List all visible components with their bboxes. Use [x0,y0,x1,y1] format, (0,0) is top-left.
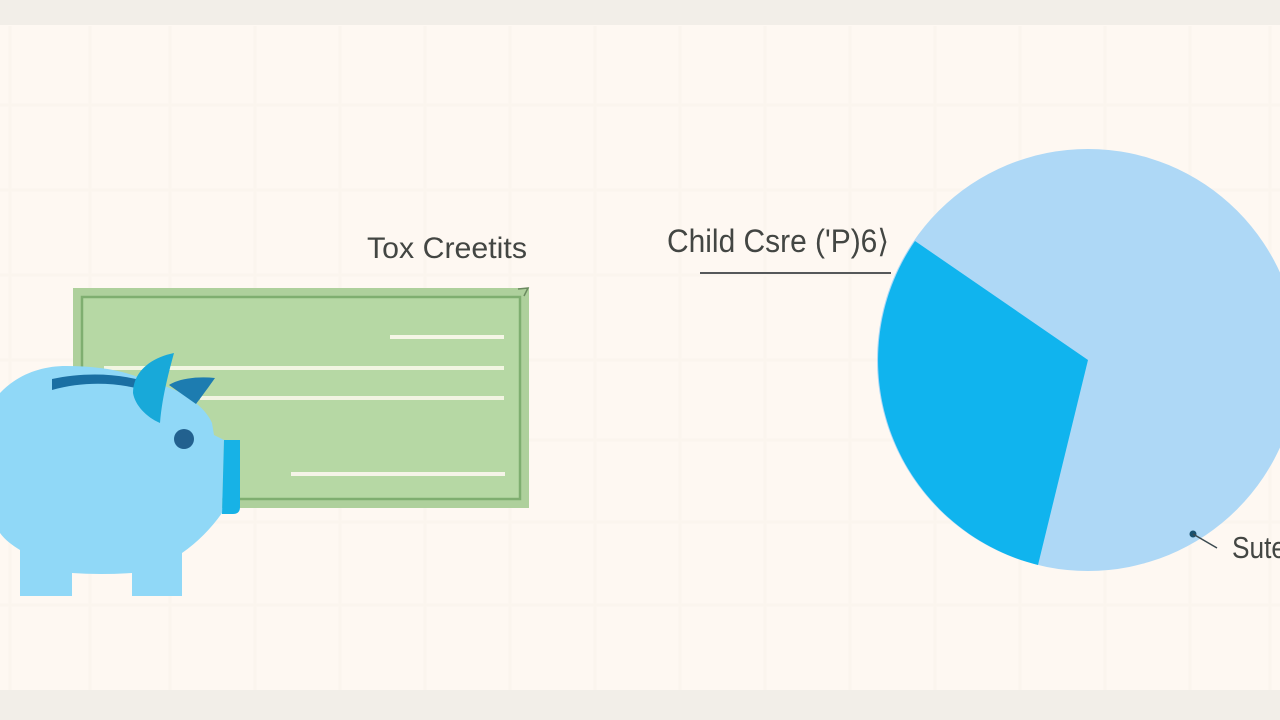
icon: piggy bank [0,353,240,596]
callout: pie slice label [1190,530,1280,565]
panel: tax credit cheque [73,288,529,508]
label: child care: Child Csre ('P)6⟩ [667,223,889,259]
pie chart [877,149,1280,571]
label: tax credits: Tox Creetits [367,232,527,265]
